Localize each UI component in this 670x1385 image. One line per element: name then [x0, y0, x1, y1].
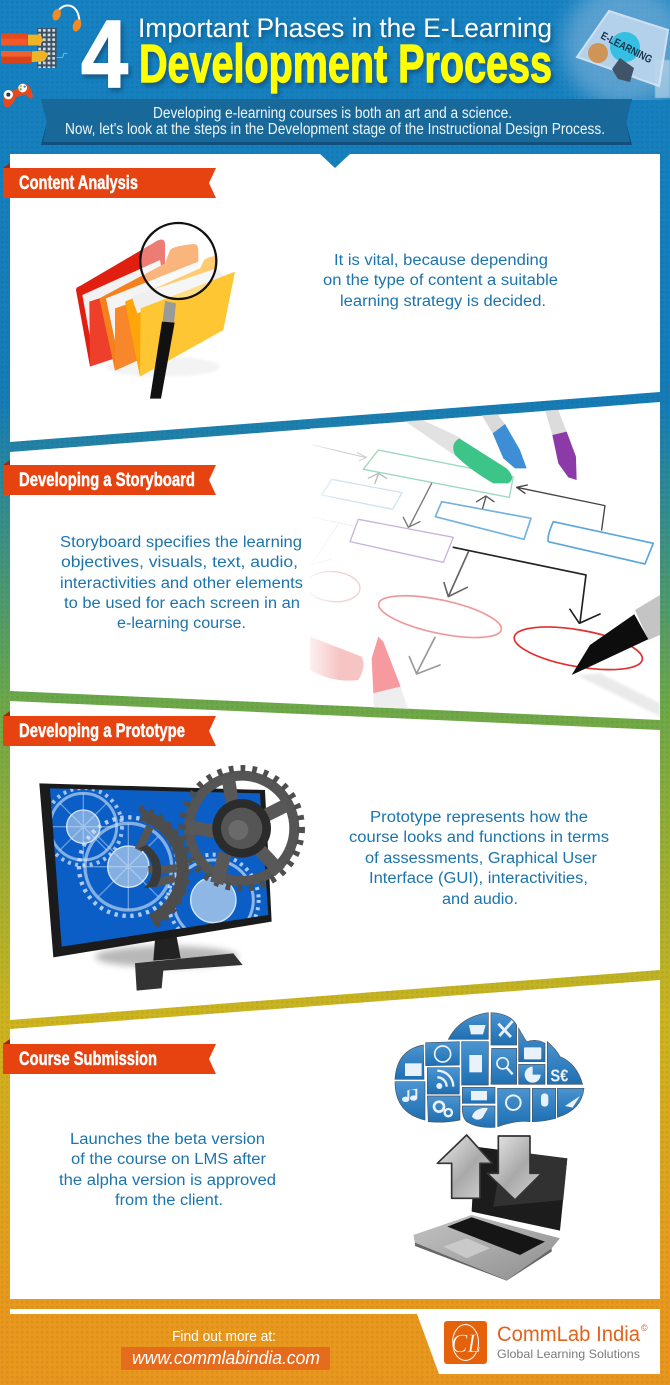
logo: commlab india: CL: [451, 1329, 481, 1358]
footer: [10, 1309, 660, 1374]
intro banner: [41, 99, 632, 145]
text: prototype: of assessments, Graphical User: [365, 850, 597, 867]
text: course submission: [59, 1131, 276, 1209]
title: Important Phases in the E-Learning: [138, 13, 552, 43]
ribbon: course submission: Course Submission: [19, 1049, 157, 1070]
text: prototype: Interface (GUI), interactivities,: [369, 870, 588, 887]
panel: prototype: [3, 701, 660, 1020]
ribbon: storyboard: Developing a Storyboard: [19, 470, 195, 491]
header illustration: e-learning tablet: [563, 0, 670, 107]
text: storyboard: interactivities and other elements: [60, 575, 303, 592]
text: storyboard: objectives, visuals, text, audio,: [61, 554, 298, 571]
text: storyboard: to be used for each screen in an: [64, 595, 300, 612]
icon: hands typing on keyboard: [1, 28, 67, 68]
text: course submission: of the course on LMS after: [71, 1151, 266, 1168]
icon: game controller: [3, 84, 33, 107]
illustration: flowchart with markers: [300, 410, 660, 717]
text: course submission: the alpha version is approved: [59, 1172, 276, 1189]
text: content analysis: [323, 252, 558, 310]
text: content analysis: learning strategy is decided.: [340, 293, 546, 310]
panel: storyboard: [3, 402, 660, 720]
ribbon: course submission: [3, 1039, 216, 1074]
ribbon: prototype: Developing a Prototype: [19, 721, 185, 742]
ribbon: content analysis: Content Analysis: [19, 173, 138, 194]
icon: app cloud: [395, 1013, 584, 1127]
text: course submission: Launches the beta version: [70, 1131, 265, 1148]
icon: folders and magnifier: [76, 223, 235, 399]
title: [81, 1, 552, 108]
icon: app cloud: S€: [550, 1065, 568, 1085]
text: prototype: [349, 809, 609, 908]
title: 4: [81, 1, 128, 108]
panel: course submission: [3, 980, 660, 1299]
logo: commlab india: CommLab India: [497, 1323, 640, 1346]
intro banner: Now, let's look at the steps in the Development stage of the Instructional Design Process.: [65, 121, 605, 138]
icon: laptop: [413, 1147, 567, 1281]
text: storyboard: Storyboard specifies the learning: [60, 534, 302, 551]
ribbon: storyboard: [3, 460, 216, 495]
text: prototype: Prototype represents how the: [370, 809, 588, 826]
text: storyboard: e-learning course.: [117, 615, 246, 632]
text: storyboard: [60, 534, 303, 632]
intro banner: Developing e-learning courses is both an art and a science.: [153, 105, 512, 122]
text: prototype: and audio.: [442, 891, 518, 908]
ribbon: prototype: [3, 711, 216, 746]
text: content analysis: on the type of content a suitable: [323, 272, 558, 289]
icon: upload and download arrows: [437, 1135, 542, 1200]
illustration: app cloud and laptop: [395, 1013, 584, 1281]
text: find out more: Find out more at:: [172, 1329, 276, 1345]
illustration: monitor with gears: [39, 769, 301, 991]
logo: commlab india: Global Learning Solutions: [497, 1347, 640, 1361]
logo: commlab india: ©: [641, 1323, 648, 1333]
panel: content analysis: [3, 154, 660, 442]
text: prototype: course looks and functions in terms: [349, 829, 609, 846]
header illustration: e-learning tablet: E-LEARNING: [599, 30, 654, 66]
ribbon: content analysis: [3, 163, 216, 198]
text: content analysis: It is vital, because depending: [334, 252, 548, 269]
icon: headset: [51, 5, 83, 33]
logo: commlab india: [444, 1321, 648, 1364]
link: website: www.commlabindia.com: [132, 1348, 320, 1368]
text: course submission: from the client.: [115, 1192, 223, 1209]
